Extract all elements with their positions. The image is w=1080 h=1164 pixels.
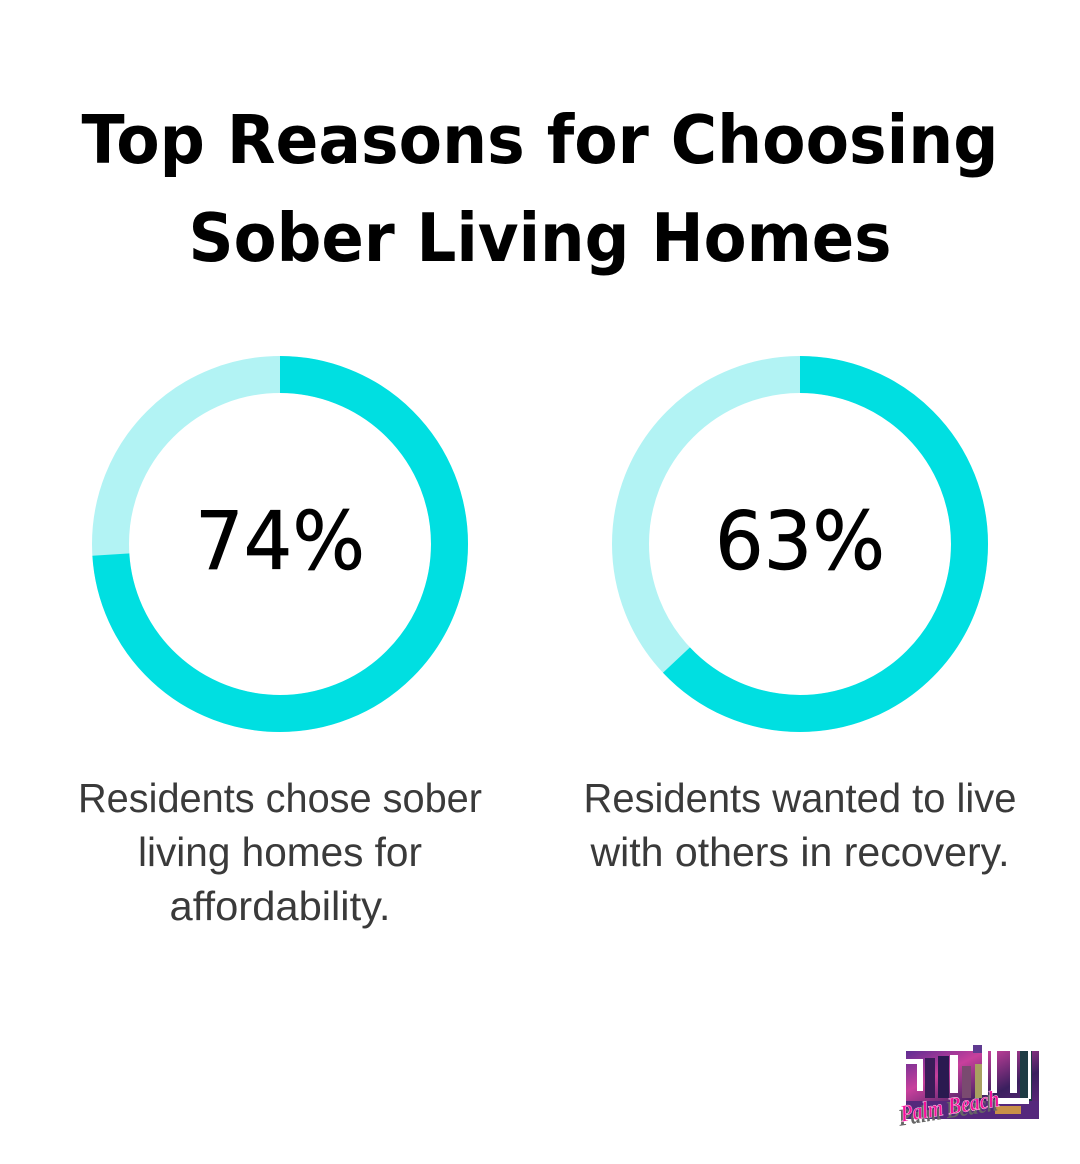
logo: Amity Palm Beach <box>896 1045 1039 1132</box>
logo: Amity Palm Beach: Palm Beach <box>896 1090 999 1132</box>
caption: affordability: affordability. <box>170 883 390 929</box>
caption: recovery: Residents wanted to live <box>584 775 1016 821</box>
donut chart: 74%: 74% <box>195 495 365 588</box>
title <box>82 101 998 277</box>
caption: recovery: with others in recovery. <box>589 829 1010 875</box>
caption: affordability: living homes for <box>138 829 422 875</box>
donut chart: 63% <box>630 374 970 714</box>
caption: recovery <box>584 775 1016 875</box>
title: Top Reasons for Choosing <box>82 101 998 179</box>
logo: Amity Palm Beach: Palm Beach <box>898 1086 1001 1128</box>
caption: affordability: Residents chose sober <box>78 775 482 821</box>
donut chart: 74% <box>110 374 450 714</box>
caption: affordability <box>78 775 482 929</box>
title: Sober Living Homes <box>188 199 892 277</box>
donut chart: 63%: 63% <box>715 495 885 588</box>
